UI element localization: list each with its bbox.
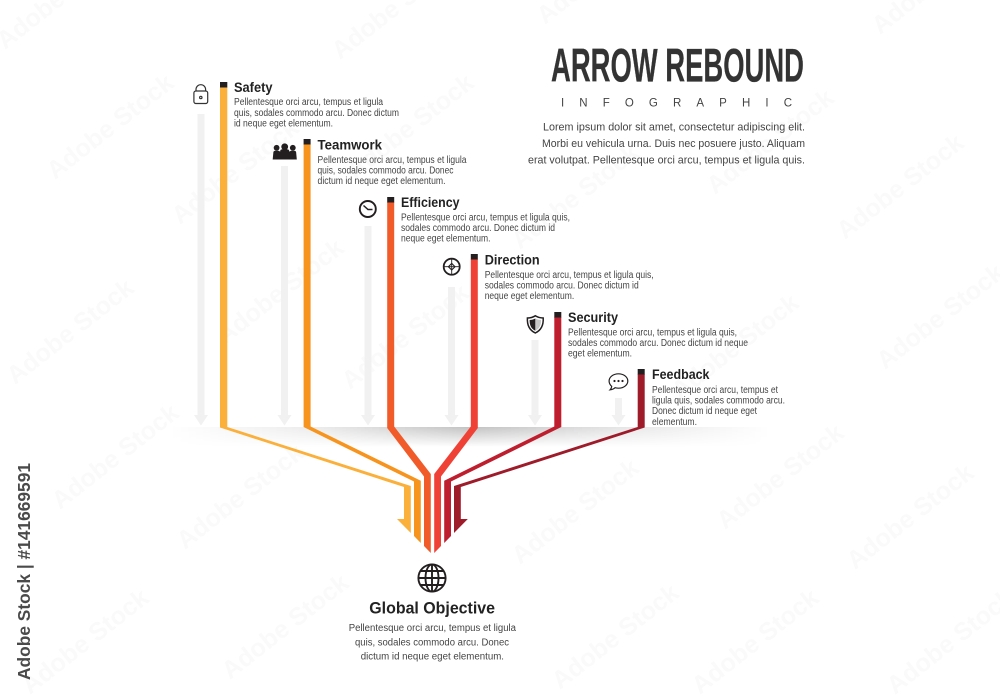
heading: Feedback [652, 367, 710, 382]
heading: Security [568, 310, 618, 325]
panel: teamwork [273, 138, 467, 187]
body: Pellentesque orci arcu, tempus et ligula [349, 623, 517, 634]
body: quis, sodales commodo arcu. Donec dictum [234, 108, 399, 119]
stock credit: Adobe Stock | #141669591 [14, 463, 34, 680]
watermark pattern: Adobe Stock [171, 439, 309, 555]
icon: shield [527, 316, 543, 333]
heading: Safety [234, 80, 273, 95]
watermark pattern: Adobe Stock [41, 69, 179, 185]
watermark pattern: Adobe Stock [831, 129, 969, 245]
icon: globe [418, 564, 446, 592]
platform shadow [232, 427, 720, 444]
body [652, 385, 785, 428]
intro paragraph: Lorem ipsum dolor sit amet, consectetur adipiscing elit. [543, 122, 805, 134]
arrow: efficiency [387, 197, 431, 553]
watermark pattern: Adobe Stock [211, 234, 349, 350]
watermark pattern: Adobe Stock [216, 569, 354, 685]
icon: team [273, 143, 297, 160]
body: eget elementum. [568, 348, 632, 360]
icon: clock [360, 201, 376, 217]
icon: lock [194, 85, 208, 104]
body: id neque eget elementum. [234, 118, 333, 130]
body [568, 328, 748, 360]
arrow: feedback [454, 369, 645, 533]
body: Donec dictum id neque eget [652, 406, 757, 417]
watermark pattern: Adobe Stock [46, 399, 184, 515]
watermark pattern: Adobe Stock [711, 419, 849, 535]
body: sodales commodo arcu. Donec dictum id [401, 223, 555, 234]
watermark pattern: Adobe Stock [506, 454, 644, 570]
panel: global objective [349, 564, 517, 662]
watermark pattern: Adobe Stock [666, 289, 804, 405]
panel: safety [194, 80, 399, 130]
watermark pattern: Adobe Stock [701, 84, 839, 200]
subtitle: INFOGRAPHIC [561, 98, 792, 110]
body: sodales commodo arcu. Donec dictum id [485, 280, 639, 292]
body: Pellentesque orci arcu, tempus et ligula quis, [401, 212, 570, 224]
body: ligula quis, sodales commodo arcu. [652, 396, 785, 406]
icon: speech bubble [609, 374, 628, 390]
watermark pattern: Adobe Stock [841, 459, 979, 575]
watermark pattern: Adobe Stock [166, 114, 304, 230]
body [485, 270, 654, 302]
body: sodales commodo arcu. Donec dictum id neque [568, 338, 748, 349]
heading: Efficiency [401, 195, 460, 210]
body [401, 212, 570, 244]
body [318, 155, 467, 187]
icon: compass [444, 259, 460, 275]
panel: security [527, 310, 748, 360]
heading: Teamwork [318, 138, 382, 152]
panel: direction [444, 252, 654, 302]
heading: Global Objective [369, 600, 495, 618]
body [349, 623, 517, 662]
panel: efficiency [360, 195, 570, 244]
watermark pattern: Adobe Stock [506, 139, 644, 255]
body: neque eget elementum. [485, 291, 574, 302]
intro paragraph [528, 122, 805, 166]
body: dictum id neque eget elementum. [318, 176, 446, 187]
arrow: security [444, 312, 561, 543]
arrow: direction [434, 254, 478, 553]
watermark pattern: Adobe Stock [1, 274, 139, 390]
body: elementum. [652, 417, 697, 428]
arrow: teamwork [304, 139, 421, 543]
body: Pellentesque orci arcu, tempus et ligula quis, [568, 328, 737, 338]
intro paragraph: Morbi eu vehicula urna. Duis nec posuere justo. Aliquam [542, 138, 805, 150]
arrow: safety [220, 82, 411, 533]
body: neque eget elementum. [401, 234, 490, 244]
watermark pattern: Adobe Stock [341, 69, 479, 185]
heading: Direction [485, 252, 540, 268]
title: ARROW REBOUND [551, 40, 804, 92]
body: quis, sodales commodo arcu. Donec [355, 637, 509, 648]
watermark pattern: Adobe Stock [336, 279, 474, 395]
body: quis, sodales commodo arcu. Donec [318, 166, 454, 176]
ghost arrows [194, 114, 626, 426]
body: dictum id neque eget elementum. [361, 652, 504, 662]
watermark pattern: Adobe Stock [546, 579, 684, 695]
body: Pellentesque orci arcu, tempus et ligula [318, 155, 467, 166]
body: Pellentesque orci arcu, tempus et ligula quis, [485, 270, 654, 281]
intro paragraph: erat volutpat. Pellentesque orci arcu, tempus et ligula quis. [528, 154, 805, 166]
panel: feedback [609, 367, 785, 428]
body [234, 97, 399, 130]
body: Pellentesque orci arcu, tempus et ligula [234, 97, 384, 108]
body: Pellentesque orci arcu, tempus et [652, 385, 778, 396]
